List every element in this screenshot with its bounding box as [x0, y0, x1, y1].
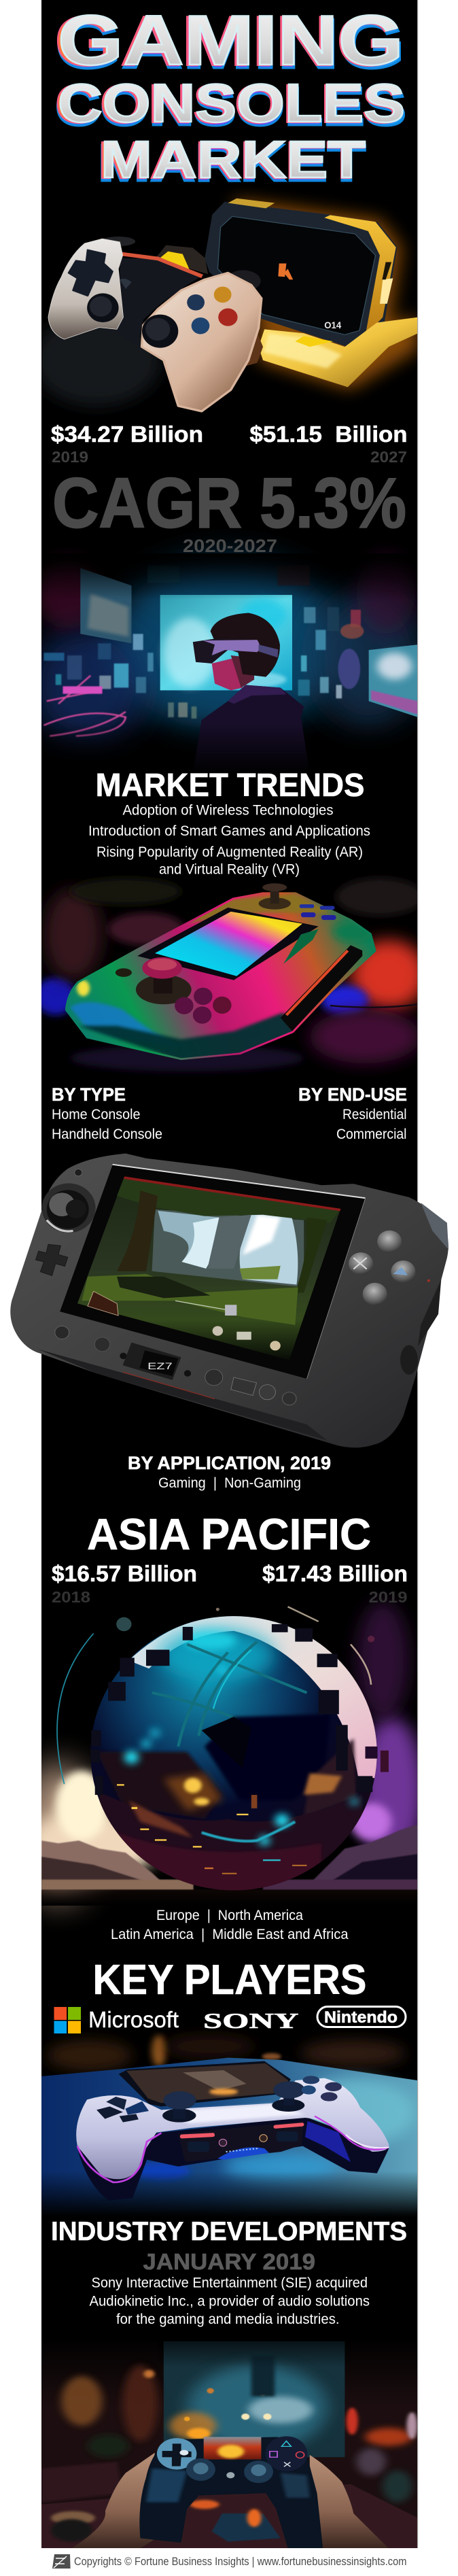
- market size 2019 Asia Pacific: $17.43 Billion: [262, 1561, 408, 1586]
- city band left: [96, 1752, 222, 1819]
- controller: left stick: [87, 293, 119, 322]
- left wall screen: [80, 568, 132, 643]
- right hand: [304, 2455, 389, 2548]
- phone: [119, 2061, 291, 2106]
- console screen: [217, 216, 376, 334]
- title line: CONSOLES: CONSOLES: [55, 76, 406, 137]
- console glow: [234, 199, 418, 390]
- controller sticks: [186, 2458, 215, 2481]
- heading: Key Players: KEY PLAYERS: [92, 1957, 367, 2004]
- controller: grip behind: [246, 334, 264, 366]
- controller touch screen: [204, 2437, 261, 2460]
- left pad: [157, 2438, 196, 2469]
- thin cyan arc: [57, 1634, 94, 1784]
- game screen: [77, 1177, 340, 1360]
- bokeh background: [152, 2035, 166, 2067]
- list: other regions: Europe | North America: [156, 1908, 303, 1923]
- logo: Nintendo: Nintendo: [324, 2008, 398, 2027]
- segment: by application: [128, 1453, 331, 1491]
- segment: by type: BY TYPE: [52, 1084, 126, 1105]
- market size 2019: [51, 422, 203, 466]
- year 2027: 2027: [370, 448, 407, 466]
- ground: [82, 1274, 298, 1325]
- development description: Sony Interactive Entertainment (SIE) acquired: [91, 2275, 368, 2291]
- title line: GAMING: GAMING: [54, 2, 402, 81]
- console body: [206, 203, 396, 347]
- footer: [52, 2554, 406, 2569]
- console logo: [278, 263, 293, 279]
- warm sky glow: [20, 1763, 96, 1902]
- title line: MARKET: MARKET: [98, 134, 366, 192]
- globe arcs: [152, 1642, 307, 1747]
- city band right: [304, 1738, 357, 1817]
- illustration: VR player: [29, 553, 424, 774]
- segment: by application: Gaming | Non-Gaming: [158, 1475, 301, 1491]
- illustration: rainbow handheld console: [35, 878, 427, 1071]
- development description: for the gaming and media industries.: [116, 2312, 340, 2327]
- controller: right wing: [142, 273, 262, 411]
- logo: Sony: SONY: [203, 2008, 299, 2033]
- controller: action buttons: [187, 294, 205, 311]
- CAGR period: 2020-2027: [183, 536, 277, 556]
- year 2018: 2018: [52, 1588, 90, 1606]
- console body: [67, 894, 374, 1058]
- player hair: [211, 613, 280, 677]
- plants and furniture left: [41, 2462, 123, 2502]
- mountains left: [41, 1840, 164, 1884]
- console body: [10, 1154, 448, 1447]
- list: market trends: and Virtual Reality (VR): [159, 862, 300, 877]
- room glow: [111, 559, 345, 731]
- pink light swirl: [43, 676, 126, 736]
- list: market trends: Rising Popularity of Augmented Reality (AR): [96, 844, 363, 860]
- development description: [90, 2275, 370, 2327]
- copyright line: Copyrights © Fortune Business Insights | www.fortunebusinessinsights.com: [74, 2555, 406, 2568]
- title line: GAMING: GAMING: [58, 1, 404, 80]
- game HUD: [124, 1178, 340, 1210]
- heading: Market Trends: MARKET TRENDS: [95, 768, 364, 804]
- logo: Microsoft: Microsoft: [88, 2007, 179, 2032]
- room base: [41, 2340, 418, 2548]
- right wall screen: [369, 645, 418, 717]
- dark core: [205, 1714, 330, 1800]
- logos: key players: [54, 2007, 406, 2033]
- top stick and buttons: [259, 897, 291, 910]
- left stick: [41, 1183, 96, 1233]
- globe lower band: [99, 1792, 362, 1894]
- console gold side: [324, 215, 396, 336]
- illustration: controller and console: [32, 199, 418, 411]
- action buttons: [377, 1231, 402, 1253]
- logo: Microsoft: [54, 2007, 179, 2033]
- controller: left wing: [48, 239, 123, 339]
- year 2019: 2019: [52, 448, 88, 466]
- console top tab: [228, 199, 275, 208]
- side slot: [281, 945, 362, 1031]
- illustration: hands holding controller: [41, 2336, 418, 2548]
- right side stick and grille: [400, 1345, 418, 1375]
- fades: [41, 553, 419, 599]
- globe cyan upper glow: [158, 1628, 275, 1682]
- list: other regions: [111, 1908, 349, 1942]
- controller: yellow hump: [154, 245, 208, 274]
- mountains right: [310, 1825, 418, 1884]
- edge blocks: [90, 1624, 372, 1795]
- list: other regions: Latin America | Middle East and Africa: [111, 1927, 349, 1942]
- globe crescent: [128, 1615, 380, 1779]
- top fade of screen: [158, 2338, 351, 2367]
- segment: by type: Handheld Console: [52, 1127, 162, 1142]
- mid haze: [152, 1209, 304, 1288]
- player face and neck: [212, 658, 243, 690]
- neon trims: [77, 2133, 161, 2182]
- screen bezel: [60, 1165, 366, 1379]
- development date: JANUARY 2019: [143, 2249, 315, 2274]
- console model label: O14: [324, 320, 341, 330]
- title line: CONSOLES: CONSOLES: [55, 73, 404, 134]
- segment: by end-use: Commercial: [336, 1127, 406, 1142]
- left hand: [71, 2453, 187, 2548]
- floor shadow glow: [41, 325, 164, 409]
- d-pad: [106, 2097, 126, 2110]
- joystick: [136, 975, 192, 1004]
- tree canopy: [117, 1177, 340, 1223]
- amber city lights: [117, 1778, 307, 1874]
- year 2019 Asia Pacific: 2019: [368, 1588, 408, 1606]
- segment: by type: Home Console: [52, 1107, 140, 1122]
- thumb sticks: [162, 2109, 196, 2123]
- small floating tiles: [43, 566, 364, 719]
- console side light: [380, 278, 393, 304]
- console shadow: [70, 1045, 304, 1071]
- title line: CONSOLES: CONSOLES: [58, 73, 405, 133]
- illustration: cyber globe: [20, 1601, 424, 1906]
- list: market trends: [88, 802, 370, 877]
- list: market trends: Adoption of Wireless Technologies: [122, 802, 333, 819]
- lower lip: [38, 1349, 328, 1441]
- footer logo: [52, 2554, 71, 2569]
- small moon: [116, 1617, 132, 1631]
- cyan glows: [124, 1666, 357, 1845]
- backdrop colour blobs: [351, 940, 427, 1010]
- title line: MARKET: MARKET: [98, 131, 365, 190]
- segment: by application: BY APPLICATION, 2019: [128, 1453, 331, 1473]
- title line: GAMING: GAMING: [55, 5, 405, 84]
- illustration: grey handheld console: [10, 1154, 448, 1447]
- forest light: [158, 1211, 219, 1269]
- controller: dark centre: [120, 258, 205, 335]
- VR headset: [193, 638, 260, 664]
- floor and table: [41, 2484, 418, 2548]
- globe sphere: [90, 1616, 377, 1890]
- controller shell: [76, 2078, 389, 2179]
- controller underside: [77, 2116, 389, 2201]
- heading: Industry Developments: INDUSTRY DEVELOPMENTS: [51, 2217, 407, 2246]
- segment: by end-use: Residential: [342, 1107, 406, 1122]
- list: market trends: Introduction of Smart Games and Applications: [88, 823, 370, 839]
- small display readout: EZ7: [147, 1362, 173, 1372]
- face buttons: [175, 997, 194, 1014]
- body reflections: [70, 894, 374, 1061]
- controller: d-pad: [69, 250, 113, 296]
- controller: top bumpers: [101, 237, 135, 246]
- illustration: lavender gamepad with phone: [41, 2035, 417, 2216]
- market size 2027: $51.15 Billion: [250, 422, 408, 447]
- centre panel: [178, 2121, 304, 2162]
- shell highlight: [161, 2104, 305, 2123]
- screen: [137, 908, 319, 980]
- central screen: [160, 595, 292, 690]
- bottom controls: [55, 1326, 69, 1339]
- console base: [259, 317, 418, 387]
- title: Gaming Consoles Market: [54, 1, 406, 192]
- warm room right: [347, 2407, 358, 2435]
- action buttons: [302, 2076, 319, 2084]
- title line: MARKET: MARKET: [101, 131, 366, 189]
- market size 2019: $34.27 Billion: [51, 422, 203, 447]
- controller: right stick: [142, 315, 178, 348]
- segment: by type: [52, 1084, 162, 1142]
- tree trunks: [117, 1190, 158, 1271]
- CAGR figure: CAGR 5.3%: [52, 464, 406, 543]
- segment: by end-use: [298, 1084, 407, 1142]
- market size 2027: [250, 422, 408, 466]
- player body: [193, 685, 310, 774]
- cable: [330, 1004, 418, 1008]
- segment: by end-use: BY END-USE: [298, 1084, 407, 1105]
- development description: Audiokinetic Inc., a provider of audio solutions: [90, 2294, 370, 2309]
- market size 2019 Asia Pacific: [262, 1561, 408, 1606]
- blurred city screen: [164, 2341, 345, 2457]
- market size 2018: [52, 1561, 197, 1606]
- purple sky glow: [359, 1717, 424, 1862]
- heading: Asia Pacific: ASIA PACIFIC: [87, 1509, 371, 1559]
- right pad: [265, 2436, 307, 2471]
- market size 2018: $16.57 Billion: [52, 1561, 197, 1586]
- controller body: [139, 2437, 323, 2548]
- horizon glow: [41, 1880, 194, 1890]
- table surface: [41, 2058, 417, 2216]
- d-pad: [35, 1244, 68, 1276]
- warm room left: [61, 2376, 102, 2426]
